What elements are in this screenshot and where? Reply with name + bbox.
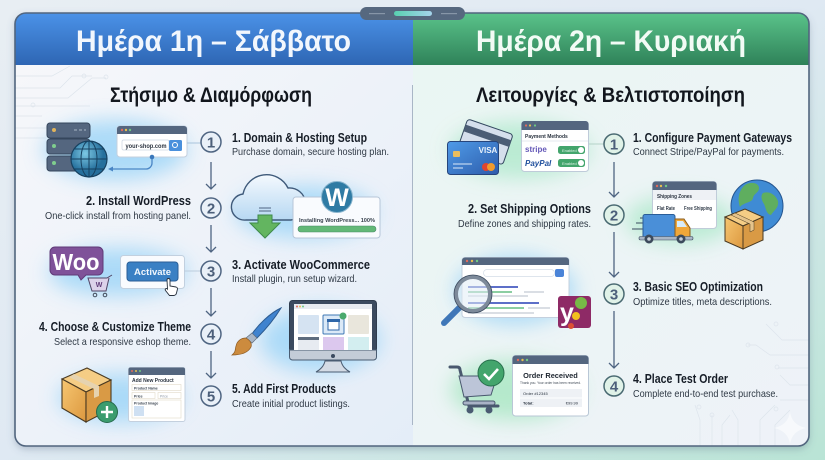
payment methods card: Enabled [562, 148, 577, 153]
shipping zones card [652, 182, 716, 228]
order received card: Order Received [523, 371, 578, 380]
step 4 marker [201, 324, 221, 344]
title: day 1: Ημέρα 1η – Σάββατο [76, 25, 351, 58]
icon: shipping zones, truck, globe and box [632, 180, 783, 249]
step 4 text: Complete end-to-end test purchase. [633, 388, 778, 400]
payment methods card: Payment Methods [525, 134, 568, 140]
order received card: Total: [523, 400, 534, 406]
step 3 marker: 3 [610, 286, 618, 304]
earth globe [731, 180, 783, 232]
step 3 marker [604, 284, 624, 304]
visa card [448, 142, 498, 174]
payment methods card [522, 121, 588, 172]
step 1 text: Connect Stripe/PayPal for payments. [633, 146, 784, 158]
step 1 text [232, 130, 389, 158]
order received card [512, 356, 588, 416]
step 1 marker: 1 [207, 134, 215, 152]
header: day 1 band [15, 13, 413, 65]
shipping zones card: Free Shipping [684, 206, 712, 212]
step 2 text [458, 201, 591, 230]
browser address bar: your-shop.com [126, 143, 167, 150]
step 4 text [39, 319, 191, 348]
step 2 marker [201, 198, 221, 218]
step 1 marker [201, 132, 221, 152]
step 3 text [232, 257, 370, 285]
visa card: VISA [479, 146, 498, 155]
icon: servers, globe and domain browser [47, 123, 201, 177]
shopping cart [450, 367, 498, 414]
steps: day 2 [458, 130, 792, 400]
step 4 marker: 4 [207, 326, 216, 344]
cardboard box [62, 368, 111, 422]
icon: brush and monitor [232, 300, 376, 372]
glows [43, 120, 735, 422]
back card [457, 119, 513, 165]
step 2 text: 2. Install WordPress [86, 193, 191, 208]
icon: cart check and order received [450, 356, 588, 416]
parcel [725, 209, 763, 249]
icon: product box and add form [62, 368, 185, 422]
step 3 text: Install plugin, run setup wizard. [232, 273, 357, 285]
plus badge [96, 402, 118, 422]
step 5 text [232, 381, 350, 410]
add product form: Price [160, 394, 168, 398]
add product form: Price [134, 394, 143, 398]
paint brush [232, 308, 281, 355]
step 5 marker: 5 [207, 388, 215, 406]
header: day 2 band [413, 13, 809, 65]
step 4 text: 4. Place Test Order [633, 371, 728, 386]
shipping zones card: Flat Rate [657, 206, 675, 212]
payment methods card: Enabled [562, 161, 577, 166]
payment methods card: stripe [525, 145, 547, 154]
arrow 2 to 3 [206, 225, 216, 252]
step 3 text: 3. Basic SEO Optimization [633, 279, 763, 294]
arrow 3 to 4 [206, 288, 216, 316]
Yoast badge: y [560, 299, 574, 327]
payment methods card: PayPal [525, 159, 552, 168]
WordPress logo [322, 182, 352, 212]
add product form [128, 368, 185, 422]
arrow 3 to 4 [609, 311, 619, 368]
search results browser [462, 258, 569, 318]
delivery truck [632, 214, 693, 244]
step 4 marker [604, 376, 624, 396]
step 2 text [45, 193, 191, 222]
top connector pill [360, 7, 465, 20]
steps: day 1 [39, 130, 389, 410]
activate card: Activate [134, 267, 171, 278]
browser address bar [117, 126, 187, 157]
shipping zones card: Shipping Zones [657, 194, 692, 200]
activate card [120, 256, 201, 288]
arrow 1 to 2 [609, 162, 619, 197]
title: day 2: Ημέρα 2η – Κυριακή [476, 25, 746, 58]
icon: credit cards and payment methods [448, 119, 604, 174]
install card [293, 197, 380, 238]
step 2 marker [604, 205, 624, 225]
connector arrow [110, 157, 152, 169]
WordPress logo: W [325, 184, 349, 212]
step 3 text [633, 279, 772, 308]
subtitle: day 2: Λειτουργίες & Βελτιστοποίηση [476, 84, 745, 107]
order received card: Thank you. Your order has been received. [520, 381, 581, 385]
icon: cloud download and WordPress install [231, 175, 380, 238]
cloud [231, 175, 306, 220]
sparkle [775, 414, 804, 442]
add product form: Add New Product [132, 378, 174, 384]
Yoast badge [558, 296, 591, 329]
add product form: Product Image [134, 402, 158, 406]
step 5 text: Create initial product listings. [232, 398, 350, 410]
step 3 marker [201, 261, 221, 281]
step 2 text: One-click install from hosting panel. [45, 210, 191, 222]
step 1 text: 1. Domain & Hosting Setup [232, 130, 367, 145]
add product form: Product Name [134, 386, 158, 390]
panel: day 2 background [413, 65, 809, 446]
icon: Woo cart and activate button [50, 247, 201, 297]
arrow 4 to 5 [206, 351, 216, 378]
download arrow [250, 208, 280, 238]
server rack [47, 123, 90, 171]
shopping cart [88, 275, 112, 297]
step 3 text: Optimize titles, meta descriptions. [633, 296, 772, 308]
step 3 text: 3. Activate WooCommerce [232, 257, 370, 272]
hand cursor [165, 278, 178, 296]
step 4 marker: 4 [610, 378, 619, 396]
step 1 marker: 1 [610, 136, 618, 154]
step 4 text [633, 371, 778, 400]
step 2 text: 2. Set Shipping Options [468, 201, 591, 216]
icon: search results, magnifier and Yoast [444, 258, 591, 329]
check badge [478, 360, 504, 386]
arrow 2 to 3 [609, 232, 619, 277]
step 1 marker [604, 134, 624, 154]
step 4 text: Select a responsive eshop theme. [54, 336, 191, 348]
step 3 marker: 3 [207, 264, 215, 280]
panel: day 1 background [330, 364, 413, 445]
shopping cart: W [96, 282, 103, 289]
arrow 1 to 2 [206, 162, 216, 189]
step 5 marker [201, 386, 221, 406]
install card: Installing WordPress... 100% [299, 218, 375, 224]
step 2 marker: 2 [610, 208, 618, 224]
order received card: €99.99 [566, 400, 579, 406]
step 2 marker: 2 [207, 200, 215, 218]
subtitle: day 1: Στήσιμο & Διαμόρφωση [110, 84, 312, 107]
Woo bubble: Woo [52, 249, 100, 275]
order received card: Order #12345 [523, 391, 548, 396]
step 1 text: Purchase domain, secure hosting plan. [232, 146, 389, 158]
magnifier [444, 275, 492, 323]
step 2 text: Define zones and shipping rates. [458, 218, 591, 230]
globe [71, 141, 107, 177]
step 5 text: 5. Add First Products [232, 381, 336, 396]
monitor [290, 300, 376, 372]
step 1 text [633, 130, 792, 158]
step 4 text: 4. Choose & Customize Theme [39, 319, 191, 334]
